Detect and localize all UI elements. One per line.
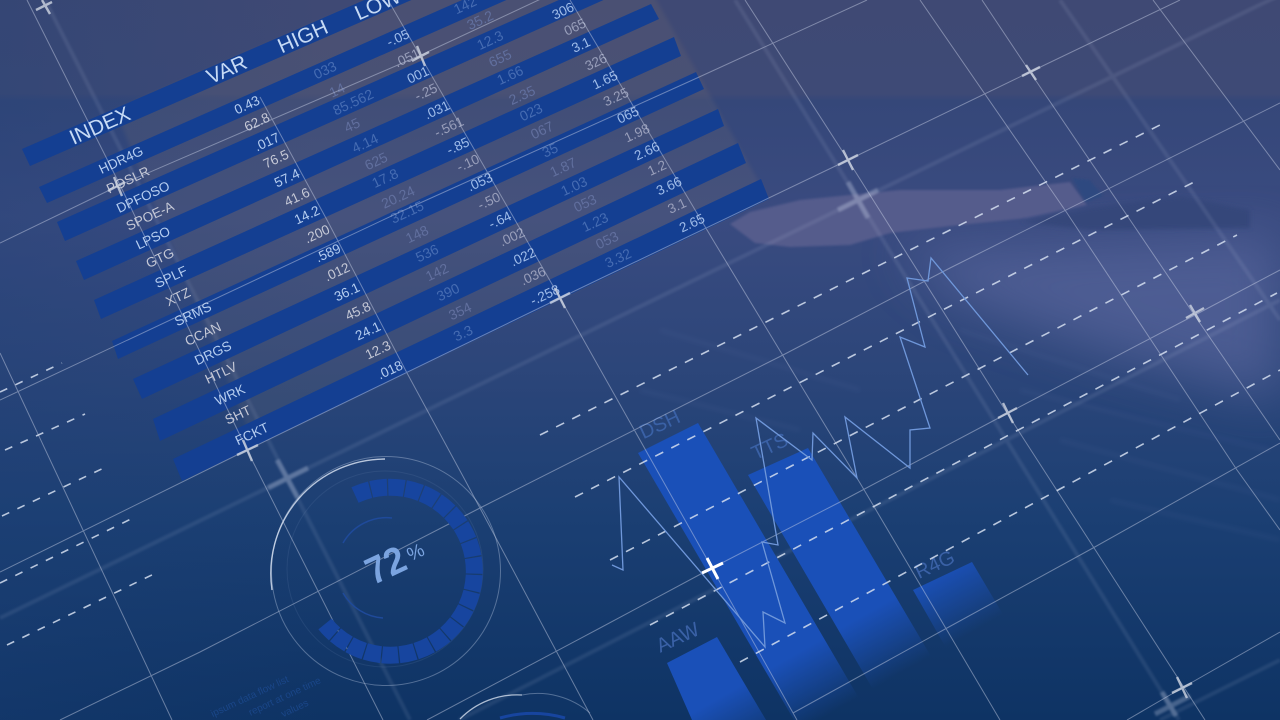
table column: index names: [96, 143, 271, 448]
bar: TTS: [748, 448, 945, 710]
table column: faded values: 053: [593, 228, 621, 252]
table column: faded values: 35: [540, 139, 561, 161]
table column: LOW values: -.64: [486, 208, 514, 232]
gauge bright arc: [271, 459, 385, 590]
table column: VAR values: .018: [375, 358, 405, 382]
table column: faded values: 067: [528, 118, 556, 142]
gauge: partial bottom: [460, 693, 590, 719]
gauge percent sign: %: [404, 540, 428, 566]
dark wave fin: [1072, 178, 1103, 202]
table column: index names: POSLR: [104, 163, 152, 196]
table column: index names: SPLF: [153, 263, 189, 291]
table column: VAR values: .017: [252, 130, 282, 154]
table column: HIGH values: 033: [311, 58, 339, 82]
dashed lines right: [540, 125, 1280, 662]
line chart: [612, 258, 1028, 647]
table column: LOW values: [384, 26, 562, 308]
table column: faded values: 023: [517, 100, 545, 124]
table column: HIGH values: 32.15: [388, 197, 426, 227]
table column: HIGH values: 14: [327, 79, 348, 101]
table column: LOW values: -.85: [444, 134, 472, 158]
table column: faded values: 1.87: [547, 154, 579, 180]
table column: VAR values: 12.3: [363, 338, 393, 362]
table column: index names: SHT: [223, 402, 253, 428]
table column: LOW values: .002: [497, 225, 527, 249]
table column: LOW values: .022: [508, 245, 538, 269]
table column: index names: GTG: [144, 245, 176, 271]
table column: last values: 065: [615, 103, 641, 127]
table row bars: [22, 0, 769, 481]
table column: LOW values: .053: [465, 170, 495, 194]
gauge: 72 percent: [271, 456, 500, 686]
data table panel: [115, 0, 768, 445]
table column: VAR values: 41.6: [282, 185, 312, 209]
gauge inner arcs: [343, 518, 392, 618]
table column: LOW values: -.50: [475, 189, 503, 213]
wave foam: [730, 182, 1087, 247]
table column: index names: SPOE-A: [124, 198, 176, 234]
gauge inner ring: [287, 471, 483, 667]
bar labels: R4G: [912, 546, 958, 584]
table header: [66, 0, 405, 150]
table column: LOW values: -.25: [412, 80, 440, 104]
table column: VAR values: [232, 93, 405, 382]
table column: index names: FCKT: [233, 420, 271, 448]
table header: INDEX: [66, 102, 134, 150]
table column: last values: [550, 0, 707, 235]
table column: HIGH values: 4.14: [349, 130, 381, 156]
table header: VAR: [203, 51, 251, 89]
table column: LOW values: -.05: [384, 26, 412, 50]
table column: LOW values: .031: [422, 98, 452, 122]
table column: HIGH values: 625: [362, 149, 390, 173]
table column: last values: 1.2: [645, 157, 669, 179]
table column: index names: DRGS: [192, 338, 234, 368]
table column: VAR values: 57.4: [272, 165, 303, 190]
blurred crosshairs: [268, 182, 1190, 716]
table column: LOW values: 001: [405, 63, 431, 87]
table column: VAR values: .589: [313, 241, 343, 265]
table column: index names: DPFOSO: [114, 178, 172, 216]
table column: VAR values: .012: [322, 260, 352, 284]
table column: faded values: 1.66: [494, 62, 526, 88]
table column: HIGH values: 3.3: [451, 322, 475, 344]
table header: HIGH: [274, 16, 332, 58]
table column: faded values: 2.35: [506, 82, 538, 108]
table column: last values: 2.65: [677, 211, 707, 235]
bar labels: TTS: [748, 429, 792, 465]
table column: VAR values: 36.1: [332, 280, 362, 304]
table column: HIGH values: 85.562: [330, 86, 376, 118]
gauge outer ring: [272, 456, 500, 686]
table column: HIGH values: 390: [434, 280, 462, 304]
table column: VAR values: 62.8: [242, 110, 272, 134]
table column: last values: 3.1: [569, 34, 593, 56]
bar: R4G: [913, 562, 1030, 690]
table column: last values: 3.25: [601, 85, 631, 109]
table column: VAR values: 24.1: [353, 319, 383, 343]
table column: last values: 3.66: [654, 174, 684, 198]
table column: VAR values: 45.8: [343, 299, 373, 323]
table column: last values: 065: [562, 15, 588, 39]
gauge segmented progress: [325, 487, 474, 655]
table column: index names: LPSO: [134, 224, 172, 252]
table column: index names: WRK: [213, 382, 247, 408]
bar chart: [636, 406, 1030, 720]
faint small caption: ipsum data flow list: [209, 674, 291, 720]
table column: LOW values: .036: [518, 264, 548, 288]
table column: LOW values: .051: [392, 46, 422, 70]
dashed lines left: [0, 363, 158, 645]
table column: faded values: [451, 0, 634, 271]
table column: last values: 3.1: [665, 195, 689, 217]
table column: HIGH values: 45: [342, 114, 363, 136]
table column: LOW values: -.258: [528, 282, 562, 308]
table column: last values: 2.66: [632, 139, 662, 163]
table column: VAR values: 0.43: [232, 93, 262, 117]
table column: last values: 1.98: [622, 121, 652, 145]
bar: DSH: [638, 423, 860, 720]
table column: faded values: 35.2: [464, 7, 496, 33]
table column: LOW values: -.10: [454, 151, 482, 175]
table column: HIGH values: 17.8: [369, 165, 401, 191]
faint small caption: report at one time: [247, 675, 323, 719]
table column: faded values: 655: [486, 46, 514, 70]
table column: HIGH values: [311, 58, 475, 344]
table column: VAR values: 76.5: [261, 147, 291, 171]
table column: index names: CCAN: [182, 319, 224, 349]
table column: last values: 326: [583, 50, 609, 74]
table column: faded values: 053: [571, 191, 599, 215]
table column: index names: HTLV: [203, 359, 239, 387]
faint small caption: values: [280, 698, 310, 720]
gauge value: 72: [359, 539, 413, 593]
table column: HIGH values: 20.24: [379, 182, 417, 212]
table column: faded values: 12.3: [474, 27, 506, 53]
table column: VAR values: 14.2: [292, 203, 322, 227]
bar labels: [636, 406, 958, 657]
table column: HIGH values: 148: [403, 222, 431, 246]
table column: index names: XTZ: [163, 285, 193, 309]
bar labels: AAW: [653, 619, 703, 657]
light sea area: [900, 235, 1280, 400]
table column: VAR values: .200: [302, 222, 332, 246]
table column: last values: 1.65: [590, 68, 620, 92]
dark swell: [1022, 196, 1250, 230]
table column: LOW values: -.561: [432, 114, 466, 140]
table column: index names: HDR4G: [96, 143, 146, 177]
table column: faded values: 1.23: [579, 209, 611, 235]
table column: index names: SRMS: [172, 299, 214, 329]
table column: faded values: 3.32: [602, 245, 634, 271]
table column: HIGH values: 142: [423, 260, 451, 284]
sea streaks: [640, 330, 1280, 540]
bar: AAW: [667, 637, 766, 720]
table column: faded values: 1.03: [558, 173, 590, 199]
table column: HIGH values: 354: [446, 299, 474, 323]
table column: last values: 306: [550, 0, 576, 23]
table column: HIGH values: 536: [413, 241, 441, 265]
crosshair: main bright marker: [702, 558, 723, 579]
bar labels: DSH: [636, 406, 684, 444]
